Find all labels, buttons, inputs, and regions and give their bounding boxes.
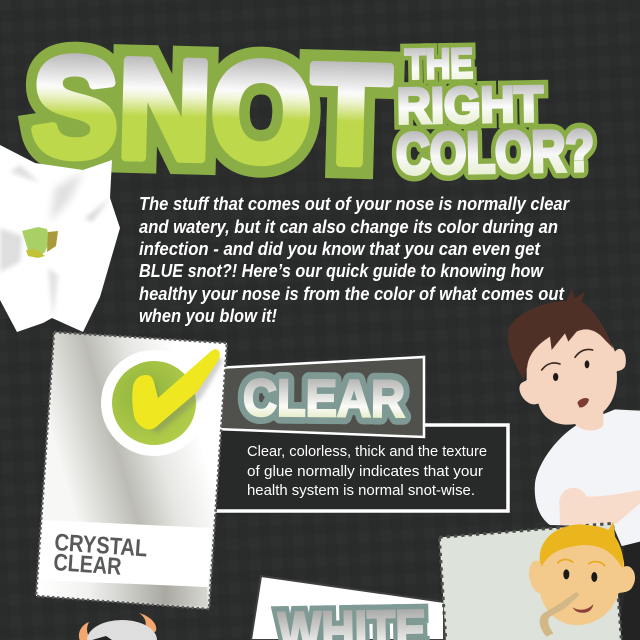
illustration: man — [508, 288, 640, 640]
card lower strip — [37, 580, 208, 607]
icon: cow head — [79, 613, 157, 640]
crystal clear label: CRYSTAL — [54, 529, 148, 562]
boy arm and finger — [540, 592, 579, 637]
clear description text: of glue normally indicates that your — [247, 463, 483, 480]
man head — [519, 328, 626, 431]
card body — [36, 332, 227, 609]
card perforated edge — [36, 332, 227, 609]
card label band — [38, 520, 212, 587]
clear description text: Clear, colorless, thick and the texture — [247, 443, 487, 460]
man hair — [508, 288, 613, 380]
crystal clear label: CLEAR — [53, 549, 122, 581]
heading banner: clear: CLEAR — [243, 369, 405, 429]
intro text block — [139, 193, 571, 326]
title word: COLOR?: COLOR? — [395, 118, 595, 187]
intro text block: infection - and did you know that you can even get — [139, 238, 541, 259]
heading banner: clear: CLEAR — [243, 369, 405, 429]
title word: RIGHT: RIGHT — [397, 76, 543, 134]
intro text block: and watery, but it can also change its color during an — [139, 216, 558, 237]
man face details — [542, 349, 593, 407]
boy face details — [557, 559, 605, 613]
man shirt — [535, 409, 640, 546]
panel: pale green card with boy — [439, 522, 635, 640]
boy head — [529, 539, 635, 625]
icon: white flower — [0, 145, 120, 332]
title word: THE: THE — [405, 39, 473, 88]
man trousers — [617, 542, 640, 640]
panel: crystal clear card — [36, 332, 227, 609]
intro text block: healthy your nose is from the color of what comes out — [139, 283, 565, 304]
crystal clear label — [53, 529, 148, 581]
title word: COLOR?: COLOR? — [395, 118, 595, 187]
title word: SNOT: SNOT — [30, 27, 392, 194]
title word: SNOT: SNOT — [30, 27, 392, 194]
clear description text: health system is normal snot-wise. — [247, 482, 475, 499]
panel: white card — [251, 576, 444, 640]
title — [30, 27, 595, 194]
icon: check badge — [101, 349, 223, 456]
pale card — [439, 523, 622, 640]
title word: THE: THE — [405, 39, 473, 88]
title word: RIGHT: RIGHT — [397, 76, 543, 134]
intro text block: when you blow it! — [139, 305, 277, 326]
clear description text — [247, 443, 487, 499]
heading banner: clear — [215, 357, 424, 437]
intro text block: BLUE snot?! Here’s our quick guide to knowing how — [139, 260, 544, 281]
panel: clear explanation box — [205, 425, 508, 511]
intro text block: The stuff that comes out of your nose is normally clear — [139, 193, 571, 214]
boy hair — [540, 522, 623, 568]
man arm — [559, 488, 640, 525]
